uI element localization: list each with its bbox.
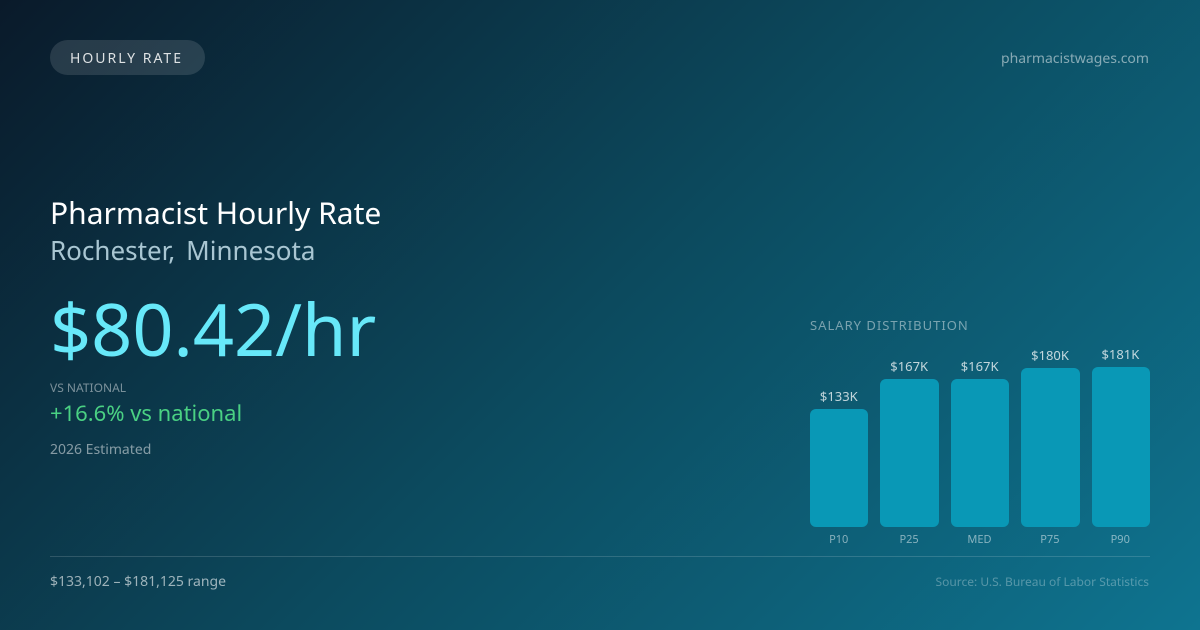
value: median: $167K xyxy=(961,357,998,375)
main value: $80.42/hr xyxy=(50,280,376,378)
year note: 2026 Estimated xyxy=(50,440,151,459)
axis label: P75: P75 xyxy=(1040,532,1060,547)
comparison label: VS NATIONAL xyxy=(50,379,126,396)
axis label: P25: P25 xyxy=(899,532,919,547)
value: P25: $167K xyxy=(890,357,928,375)
bar: P90 xyxy=(1092,367,1150,527)
footer: source: Source: U.S. Bureau of Labor Statistics xyxy=(936,573,1149,590)
axis label: P10: P10 xyxy=(829,532,848,547)
subtitle: location: Rochester, Minnesota xyxy=(50,232,315,268)
value: P90: $181K xyxy=(1102,345,1139,363)
title: Pharmacist Hourly Rate xyxy=(50,192,381,233)
badge: hourly rate xyxy=(50,40,205,75)
axis label: median: MED xyxy=(967,532,992,547)
bar: median xyxy=(951,379,1009,527)
bar: P75 xyxy=(1021,368,1080,527)
chart heading: SALARY DISTRIBUTION xyxy=(810,316,969,334)
footer: salary range: $133,102 – $181,125 range xyxy=(50,572,226,591)
value: P75: $180K xyxy=(1031,346,1069,364)
comparison value: +16.6% vs national xyxy=(50,398,242,428)
site name: pharmacistwages.com xyxy=(1001,49,1149,68)
bar: P10 xyxy=(810,409,868,527)
bar: P25 xyxy=(880,379,939,527)
axis label: P90: P90 xyxy=(1111,532,1130,547)
value: P10: $133K xyxy=(820,387,858,405)
badge: hourly rate: HOURLY RATE xyxy=(70,49,183,68)
